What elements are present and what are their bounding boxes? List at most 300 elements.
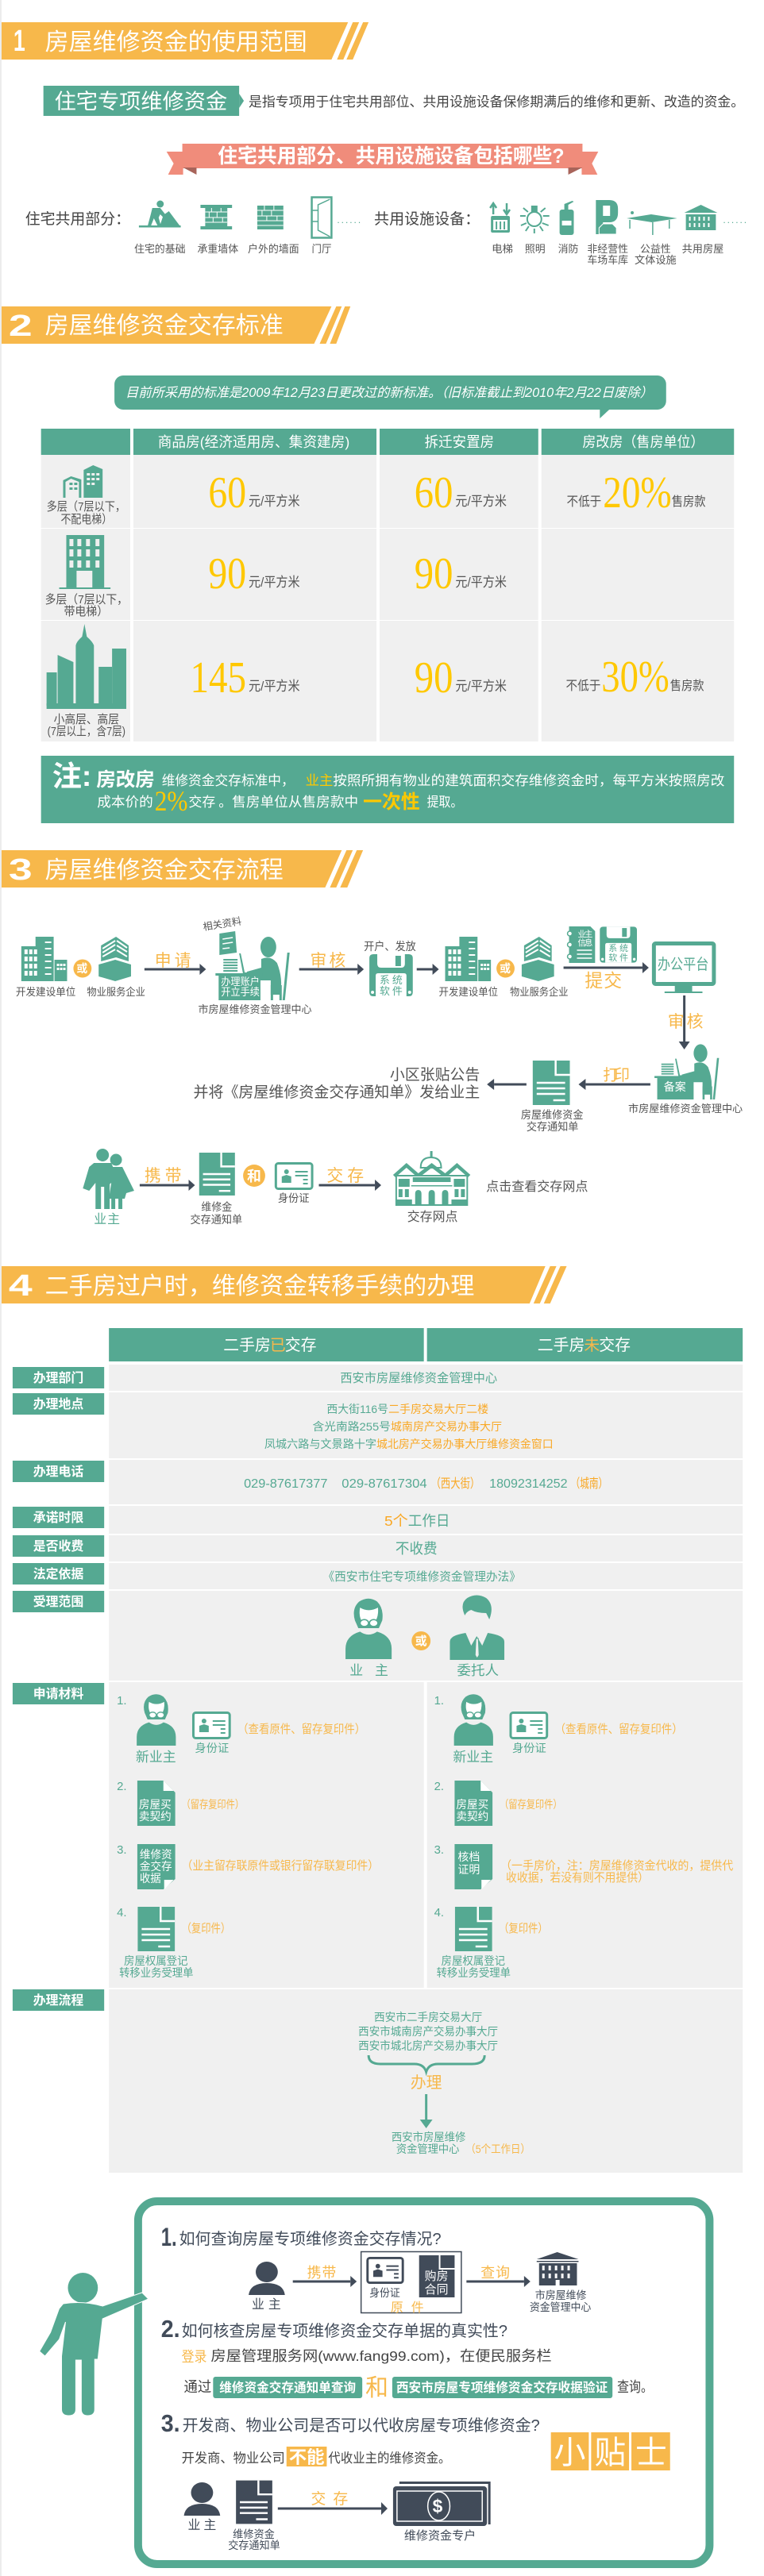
label: account opening: 开户、发放 xyxy=(364,940,416,953)
note box: 房改房 xyxy=(96,769,155,791)
notice dark xyxy=(228,2481,280,2551)
page edge xyxy=(0,0,2,2576)
arrow xyxy=(417,964,439,975)
phones xyxy=(244,1477,608,1491)
reformed housing percentages: 售房款 xyxy=(670,679,704,693)
transfer table header: 交存 xyxy=(599,1336,631,1354)
question 2: 如何核查房屋专项维修资金交存单据的真实性? xyxy=(182,2322,507,2340)
orange notes: （业主留存联原件或银行留存联复印件） xyxy=(182,1858,379,1873)
owner icon xyxy=(249,2262,285,2312)
icon: multi-storey with elevator xyxy=(60,535,110,589)
icon: proxy xyxy=(450,1596,504,1678)
section 1 banner xyxy=(2,22,368,60)
icon: owner info and software: 业主 xyxy=(577,930,592,939)
row labels: 办理流程 xyxy=(33,1993,83,2008)
contract document: 房屋买 xyxy=(139,1798,172,1811)
flow: developer or property company: 开发建设单位 xyxy=(16,986,75,998)
new owner xyxy=(453,1694,493,1765)
new owner xyxy=(136,1694,176,1765)
icon: proxy: 委托人 xyxy=(457,1663,499,1678)
label: management centre 2: 市房屋维修资金管理中心 xyxy=(628,1103,743,1115)
icon: high-rise skyline xyxy=(47,624,126,709)
tips frame xyxy=(138,2201,709,2564)
time limit: 5个 xyxy=(384,1513,408,1529)
question 2 xyxy=(161,2315,507,2343)
callout: standard date xyxy=(114,375,666,418)
label: account: 维修资金专户 xyxy=(404,2529,476,2543)
reformed housing percentages: 20% xyxy=(603,468,672,518)
announcement text: 小区张贴公告 xyxy=(390,1066,480,1084)
icon: system software xyxy=(369,954,413,997)
registration form: 转移业务受理单 xyxy=(119,1966,194,1979)
orange notes xyxy=(182,1722,379,1935)
receipt document: 维修资 xyxy=(140,1848,172,1861)
icon: filing staff: 备案 xyxy=(664,1080,686,1093)
flow: developer or property company: 或 xyxy=(76,962,87,975)
related documents: 相关资料 xyxy=(203,915,242,933)
transfer table header: 未 xyxy=(584,1336,600,1354)
addresses: 城北房产交易办事大厅维修资金窗口 xyxy=(376,1438,554,1450)
icon: outer wall xyxy=(257,206,284,229)
icon: deposit branch building xyxy=(393,1151,470,1205)
label: apply: 申请 xyxy=(155,952,191,970)
label: carry: 携带 xyxy=(145,1167,182,1185)
transfer table header: 二手房 xyxy=(223,1336,271,1354)
tips badge: 小 xyxy=(554,2435,585,2470)
reformed housing percentages: 不低于 xyxy=(566,679,600,693)
transfer table header: 二手房 xyxy=(538,1336,585,1354)
addresses: 西大街116号 xyxy=(326,1403,388,1415)
originals box: 原件 xyxy=(391,2301,424,2315)
icon captions: 文体设施 xyxy=(635,254,677,266)
icon: owner info and software: 系统 xyxy=(608,943,628,953)
handling process: 西安市房屋维修 xyxy=(392,2131,465,2143)
contract document xyxy=(137,1781,176,1826)
answer 2 line 2: 查询。 xyxy=(617,2379,653,2395)
icon captions: 非经营性 xyxy=(587,243,628,255)
contract document: 卖契约 xyxy=(456,1810,488,1823)
arrow: down review xyxy=(679,995,690,1049)
answer 2 line 2: 通过 xyxy=(184,2379,211,2395)
note box: 提取。 xyxy=(427,795,462,810)
icon: owner info and software xyxy=(568,926,637,963)
row 3 label: (7层以上，含7层) xyxy=(48,725,125,738)
ID card: 身份证 xyxy=(512,1742,546,1754)
label: branch: 交存网点 xyxy=(407,1210,457,1224)
icon: owner info and software: 信息 xyxy=(577,938,592,948)
icon: notice document xyxy=(521,1061,584,1133)
badge: or xyxy=(411,1631,430,1650)
phones: 029-87617304 xyxy=(341,1477,427,1491)
question 1: 如何查询房屋专项维修资金交存情况? xyxy=(179,2230,442,2248)
row labels: 承诺时限 xyxy=(33,1511,83,1525)
new owner: 新业主 xyxy=(453,1750,493,1765)
amounts: relocation housing: 90 xyxy=(415,653,453,703)
materials: right column xyxy=(434,1694,733,1979)
handling process: 西安市城北房产交易办事大厅 xyxy=(358,2039,498,2052)
ribbon heading xyxy=(167,144,598,175)
reformed housing percentages: 不低于 xyxy=(567,495,601,509)
icon: system software: 软件 xyxy=(380,985,403,997)
row cells xyxy=(109,1365,743,2173)
row labels: 受理范围 xyxy=(33,1594,83,1609)
icon: shared building xyxy=(685,205,717,230)
units: 元/平方米 xyxy=(249,575,300,590)
icon: management centre staff: 办理账户 xyxy=(221,976,260,988)
section 3 banner: 3 xyxy=(9,853,33,887)
flow: developer or property company 2: 或 xyxy=(500,962,511,975)
row labels: 是否收费 xyxy=(33,1539,83,1554)
reformed housing percentages xyxy=(566,468,706,702)
reformed housing percentages: 售房款 xyxy=(672,495,706,509)
addresses: 二手房交易大厅二楼 xyxy=(388,1403,488,1415)
icon: elevator xyxy=(490,203,510,233)
question 3 xyxy=(161,2409,540,2437)
arrow: left xyxy=(487,1079,527,1090)
archive proof document: 证明 xyxy=(457,1863,480,1876)
owner icon 2: 业主 xyxy=(188,2518,216,2532)
label: review: 审核 xyxy=(311,952,345,970)
pointing man xyxy=(40,2273,149,2416)
icon: ID card: 身份证 xyxy=(278,1192,310,1204)
definition: teal label: 住宅专项维修资金 xyxy=(55,90,227,114)
answer 2 line 2 xyxy=(184,2375,653,2401)
addresses: 凤城六路与文景路十字 xyxy=(264,1438,376,1450)
orange notes: 收收据，若没有则不用提供） xyxy=(506,1871,649,1885)
orange notes: （复印件） xyxy=(499,1921,548,1935)
reformed housing percentages: 30% xyxy=(601,653,669,702)
amounts: relocation housing: 90 xyxy=(415,549,453,599)
section 4 banner: 4 xyxy=(9,1269,33,1303)
orange notes: （查看原件、留存复印件） xyxy=(237,1722,365,1736)
handling process: 西安市二手房交易大厅 xyxy=(374,2011,482,2023)
icon: owner couple xyxy=(83,1149,134,1209)
icon captions: 户外的墙面 xyxy=(248,243,299,255)
label: deposit: 交存 xyxy=(311,2490,348,2508)
row labels: 办理电话 xyxy=(33,1465,83,1479)
row 2 label xyxy=(45,593,128,618)
icon: bulb xyxy=(520,206,550,233)
phones: （城南） xyxy=(571,1477,608,1491)
section 1 banner: 1 xyxy=(14,25,25,58)
units: 元/平方米 xyxy=(455,575,507,590)
owner icon 2 xyxy=(184,2482,220,2532)
link text: 点击查看交存网点 xyxy=(486,1180,588,1194)
badge: and: 和 xyxy=(247,1169,261,1184)
units xyxy=(249,494,507,694)
answer 2 line 1: 房屋管理服务网(www.fang99.com)，在便民服务栏 xyxy=(210,2348,552,2364)
icon: owner: 业主 xyxy=(349,1663,388,1678)
icon: money account xyxy=(393,2483,489,2526)
note box: 维修资金交存标准中， xyxy=(162,773,295,788)
announcement text: 并将《房屋维修资金交存通知单》发给业主 xyxy=(193,1084,480,1101)
originals box: 合同 xyxy=(425,2283,448,2297)
orange notes: （复印件） xyxy=(182,1921,230,1935)
owner icon: 业主 xyxy=(252,2297,281,2312)
transfer table header: 已 xyxy=(270,1337,286,1354)
handling process: 西安市城南房产交易办事大厅 xyxy=(358,2025,498,2038)
handling process: 办理 xyxy=(411,2074,442,2092)
table header labels: 房改房（售房单位） xyxy=(582,434,704,450)
arrow: apply xyxy=(145,964,206,975)
arrow: print xyxy=(578,1079,650,1090)
units: 元/平方米 xyxy=(249,679,300,694)
answer 3: 不能 xyxy=(289,2447,325,2467)
addresses xyxy=(264,1403,554,1450)
definition text: 是指专项用于住宅共用部位、共用设施设备保修期满后的维修和更新、改造的资金。 xyxy=(249,94,744,110)
icon captions: 门厅 xyxy=(312,243,331,255)
amounts: commercial housing: 145 xyxy=(191,653,246,703)
row 2 label: 带电梯） xyxy=(64,605,108,618)
materials: left column: 3. xyxy=(117,1843,127,1857)
icon: notice xyxy=(191,1153,242,1226)
arrow: query xyxy=(466,2276,531,2287)
question 3: 开发商、物业公司是否可以代收房屋专项维修资金? xyxy=(183,2416,540,2435)
icon: filing staff xyxy=(654,1044,719,1099)
handling process xyxy=(358,2011,531,2155)
ID card: 身份证 xyxy=(195,1742,229,1754)
notice dark: 维修资金 xyxy=(233,2528,275,2540)
archive proof document xyxy=(454,1844,492,1889)
shared parts label: 住宅共用部分： xyxy=(25,210,130,228)
icon: parking xyxy=(596,200,618,234)
answer 2 line 1: 登录 xyxy=(182,2349,206,2365)
materials: left column: 2. xyxy=(117,1780,127,1793)
materials: left column: 4. xyxy=(117,1906,127,1919)
icon captions: 电梯 xyxy=(492,243,513,255)
icon captions: 车场车库 xyxy=(587,254,628,266)
icon: ID card xyxy=(276,1164,312,1204)
icon: bearing wall xyxy=(200,205,232,229)
question 2: 2. xyxy=(161,2315,180,2343)
icon: ping pong table xyxy=(627,211,677,235)
ribbon heading: 住宅共用部分、共用设施设备包括哪些? xyxy=(218,144,565,167)
amounts: relocation housing xyxy=(415,468,453,703)
badge: and xyxy=(243,1165,265,1187)
section 1 banner: 房屋维修资金的使用范围 xyxy=(45,29,307,56)
callout: standard date: 目前所采用的标准是2009年12月23日更改过的新标准。（旧标准截止到2010年2月22日废除） xyxy=(125,385,653,400)
materials: right column: 2. xyxy=(434,1780,444,1793)
icon: management centre staff xyxy=(215,937,290,1000)
fee: 不收费 xyxy=(396,1541,438,1557)
label: centre xyxy=(530,2289,591,2313)
phones: 029-87617377 xyxy=(244,1477,328,1491)
contract document: 卖契约 xyxy=(139,1810,172,1823)
row 3 label xyxy=(48,713,125,738)
section 3 banner: 房屋维修资金交存流程 xyxy=(45,857,284,884)
row 1 label: 多层（7层以下， xyxy=(47,500,125,514)
icon: worker foundation xyxy=(139,200,181,227)
label: centre: 市房屋维修 xyxy=(535,2289,587,2301)
handling process: 资金管理中心 xyxy=(396,2143,459,2155)
table header labels xyxy=(158,434,704,450)
materials: left column: 1. xyxy=(117,1694,127,1708)
materials: right column: 3. xyxy=(434,1843,444,1857)
row labels: 申请材料 xyxy=(33,1686,83,1701)
flow: developer or property company 2 xyxy=(439,937,569,998)
phones: （西大街） xyxy=(431,1477,480,1491)
row labels: 办理地点 xyxy=(33,1396,83,1411)
arrow: carry xyxy=(140,1180,195,1191)
legal basis: 《西安市住宅专项维修资金管理办法》 xyxy=(322,1570,521,1584)
orange notes: （留存复印件） xyxy=(500,1798,562,1811)
note box: 一次性 xyxy=(363,791,420,813)
icon: system software: 系统 xyxy=(380,974,403,986)
announcement text xyxy=(193,1066,480,1101)
department: 西安市房屋维修资金管理中心 xyxy=(340,1371,497,1385)
note box: 售房单位从售房款中 xyxy=(232,795,358,810)
registration form xyxy=(437,1907,511,1979)
tips badge: 士 xyxy=(635,2435,667,2470)
icon captions: 消防 xyxy=(558,243,579,255)
label: management centre: 市房屋维修资金管理中心 xyxy=(198,1003,312,1015)
amounts: commercial housing: 90 xyxy=(208,549,246,599)
amounts: commercial housing: 60 xyxy=(208,468,246,518)
icon captions: 承重墙体 xyxy=(197,243,238,255)
definition: teal label xyxy=(44,86,244,116)
archive proof document: 核档 xyxy=(457,1850,480,1863)
row labels xyxy=(13,1367,104,2011)
arrow: deposit xyxy=(318,1180,381,1191)
note box xyxy=(41,756,734,823)
units: 元/平方米 xyxy=(249,494,300,509)
materials: left column xyxy=(117,1694,379,1979)
amounts: commercial housing xyxy=(191,468,246,703)
receipt document xyxy=(137,1844,176,1889)
note box: 按照所拥有物业的建筑面积交存维修资金时，每平方米按照房改 xyxy=(333,773,724,788)
table header labels: 商品房(经济适用房、集资建房) xyxy=(158,434,349,450)
icon: money account: $ xyxy=(433,2496,443,2516)
icon: notice document: 交存通知单 xyxy=(527,1120,578,1133)
icon captions: 照明 xyxy=(525,243,546,255)
receipt document: 收据 xyxy=(140,1872,161,1885)
arrow: deposit xyxy=(278,2502,388,2515)
registration form: 房屋权属登记 xyxy=(124,1954,188,1967)
label: review 2: 审核 xyxy=(668,1013,704,1031)
orange notes xyxy=(499,1722,733,1935)
table header labels: 拆迁安置房 xyxy=(425,434,494,450)
answer 3 xyxy=(182,2447,450,2467)
answer 2 line 2: 维修资金交存通知单查询 xyxy=(219,2380,356,2395)
related documents xyxy=(203,915,242,955)
label: owner: 业主 xyxy=(94,1212,120,1226)
transfer table header xyxy=(109,1328,743,1361)
new owner: 新业主 xyxy=(136,1750,176,1765)
contract document xyxy=(454,1781,492,1826)
flow: developer or property company xyxy=(16,937,145,998)
tips badge: 贴 xyxy=(594,2435,626,2470)
registration form: 房屋权属登记 xyxy=(442,1954,505,1967)
section 3 banner xyxy=(2,850,363,888)
answer 3: 开发商、物业公司 xyxy=(182,2451,285,2466)
row 1 label xyxy=(47,500,125,526)
icon: notice document: 房屋维修资金 xyxy=(521,1109,584,1121)
orange notes: （查看原件、留存复印件） xyxy=(555,1722,683,1736)
icon: notice: 交存通知单 xyxy=(191,1213,242,1226)
dots: ...... xyxy=(723,214,747,225)
ID card xyxy=(511,1713,547,1754)
icon: owner xyxy=(345,1599,392,1678)
note box: 。 xyxy=(218,795,232,810)
question 1 xyxy=(161,2223,442,2251)
note box: 2% xyxy=(155,785,188,817)
badge: or: 或 xyxy=(415,1634,427,1648)
notice dark: 交存通知单 xyxy=(228,2539,280,2551)
answer 3: 代收业主的维修资金。 xyxy=(328,2451,450,2466)
icon: owner info and software: 软件 xyxy=(608,952,628,963)
note box: 注: xyxy=(52,760,91,792)
label: submit: 提交 xyxy=(585,970,622,991)
icon captions: 共用房屋 xyxy=(682,243,723,255)
originals box: 购房 xyxy=(425,2270,448,2283)
row labels: 法定依据 xyxy=(33,1566,83,1581)
row 1 label: 不配电梯） xyxy=(61,513,112,526)
ID card xyxy=(193,1713,230,1754)
amounts: relocation housing: 60 xyxy=(415,468,453,518)
arrow: review xyxy=(299,964,364,975)
standards table xyxy=(41,429,734,741)
registration form: 转移业务受理单 xyxy=(437,1966,511,1979)
icon: office platform monitor: 办公平台 xyxy=(658,956,708,973)
facilities label: 共用设施设备： xyxy=(374,210,480,228)
icon captions: 公益性 xyxy=(640,243,671,255)
icon captions: 住宅的基础 xyxy=(134,243,186,255)
icon: office platform monitor xyxy=(654,943,714,993)
time limit xyxy=(384,1513,450,1529)
answer 2 line 2: 和 xyxy=(365,2375,388,2401)
flow: developer or property company 2: 物业服务企业 xyxy=(510,986,569,998)
row labels: 办理部门 xyxy=(33,1370,83,1385)
arrow: submit xyxy=(564,962,649,973)
units: 元/平方米 xyxy=(455,494,507,509)
handling process: （5个工作日） xyxy=(465,2143,531,2155)
arrow: carry xyxy=(293,2276,357,2287)
orange notes: （一手房价，注：房屋维修资金代收的，提供代 xyxy=(500,1859,733,1873)
icon: low-rise no elevator xyxy=(64,465,102,498)
contract document: 房屋买 xyxy=(456,1798,488,1811)
dots: ...... xyxy=(337,214,361,225)
section 2 banner xyxy=(2,306,350,344)
answer 2 line 2: 西安市房屋专项维修资金交存收据验证 xyxy=(396,2380,608,2395)
registration form xyxy=(119,1907,194,1979)
time limit: 工作日 xyxy=(408,1513,450,1529)
icon: extinguisher xyxy=(560,201,573,235)
note box: 交存 xyxy=(189,795,215,810)
label: carry: 携带 xyxy=(307,2265,336,2281)
icon: management centre staff: 开立手续 xyxy=(221,986,260,998)
orange notes: （留存复印件） xyxy=(182,1798,244,1811)
icon captions xyxy=(134,243,723,266)
originals box: 身份证 xyxy=(369,2287,400,2299)
originals box xyxy=(361,2251,461,2315)
flow: developer or property company 2: 开发建设单位 xyxy=(439,986,498,998)
materials: right column: 4. xyxy=(434,1906,444,1919)
addresses: 含光南路255号 xyxy=(313,1420,391,1433)
transfer table header: 交存 xyxy=(285,1336,317,1354)
label: query: 查询 xyxy=(480,2265,510,2281)
question 1: 1. xyxy=(161,2223,177,2251)
label: centre: 资金管理中心 xyxy=(530,2301,591,2313)
row 3 label: 小高层、高层 xyxy=(54,713,119,726)
note box: 成本价的 xyxy=(97,795,153,810)
section 4 banner xyxy=(2,1266,567,1303)
icon: centre building xyxy=(537,2252,578,2285)
label: deposit: 交存 xyxy=(326,1167,364,1185)
materials: right column: 1. xyxy=(434,1694,444,1708)
units: 元/平方米 xyxy=(455,679,507,694)
note box: 业主 xyxy=(306,773,333,788)
flow: developer or property company: 物业服务企业 xyxy=(87,986,145,998)
